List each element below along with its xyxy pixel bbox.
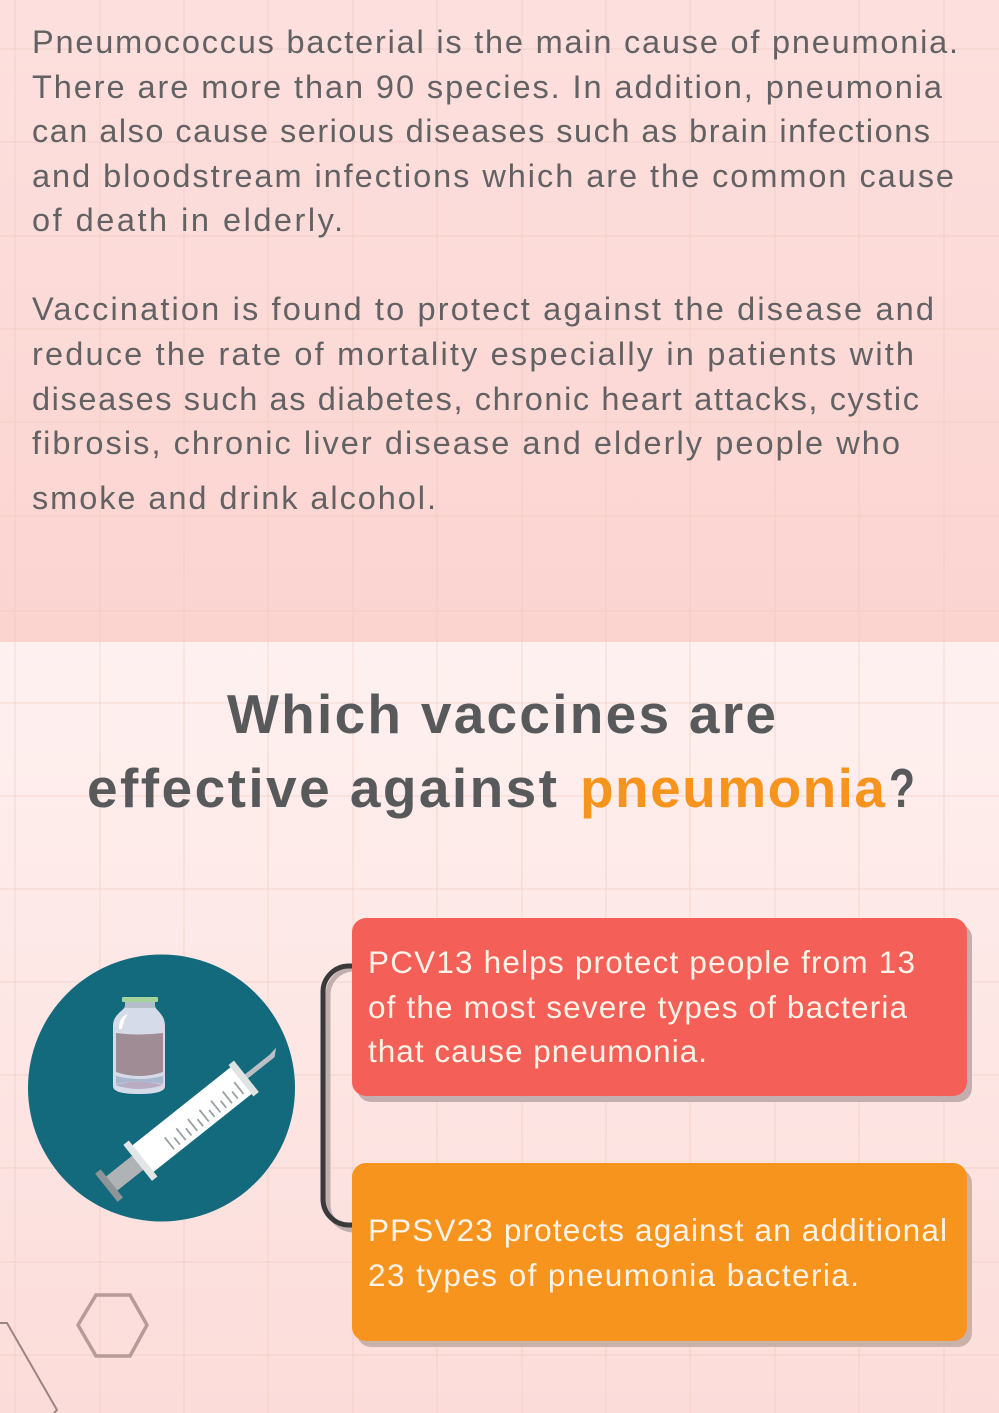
panel: PCV13 card (352, 918, 972, 1102)
text: PCV13 description: PCV13 helps protect people from 13 (368, 944, 915, 980)
text: PCV13 description: that cause pneumonia. (368, 1033, 707, 1069)
icon: syringe (92, 1033, 293, 1206)
decoration: hexagon outline (78, 1295, 147, 1356)
decoration: partial hexagon outline (0, 1323, 57, 1413)
panel: bottom background (0, 642, 999, 1413)
icon: vial (113, 997, 165, 1094)
text: PPSV23 description: PPSV23 protects against an additional (368, 1212, 947, 1248)
heading: which vaccines (87, 683, 915, 819)
heading: which vaccines: pneumonia (580, 757, 885, 819)
text block: pneumococcus intro: and bloodstream infections which are the common cause (32, 158, 954, 194)
text block: vaccination benefits: Vaccination is found to protect against the disease and (32, 291, 934, 327)
text block: pneumococcus intro: of death in elderly. (32, 202, 343, 238)
text block: vaccination benefits: fibrosis, chronic liver disease and elderly people who (32, 425, 900, 461)
connector bracket (323, 966, 358, 1230)
text: PCV13 description (368, 944, 915, 1069)
text block: pneumococcus intro (32, 24, 958, 238)
text block: vaccination benefits: reduce the rate of mortality especially in patients with (32, 336, 914, 372)
heading: which vaccines: ? (889, 757, 915, 819)
text block: vaccination benefits (32, 291, 934, 516)
text: PCV13 description: of the most severe types of bacteria (368, 989, 907, 1025)
text: PPSV23 description: 23 types of pneumonia bacteria. (368, 1257, 859, 1293)
text block: vaccination benefits: diseases such as diabetes, chronic heart attacks, cystic (32, 381, 919, 417)
panel: PPSV23 card (352, 1163, 972, 1347)
text: PPSV23 description (368, 1212, 947, 1293)
heading: which vaccines: effective against (87, 757, 557, 819)
heading: which vaccines: Which vaccines are (227, 683, 776, 745)
text block: pneumococcus intro: There are more than 90 species. In addition, pneumonia (32, 69, 943, 105)
text block: vaccination benefits: smoke and drink alcohol. (32, 480, 436, 516)
text block: pneumococcus intro: can also cause serious diseases such as brain infections (32, 113, 930, 149)
text block: pneumococcus intro: Pneumococcus bacterial is the main cause of pneumonia. (32, 24, 958, 60)
panel: top background (0, 0, 999, 642)
icon: vaccine circle with vial and syringe (28, 954, 295, 1222)
